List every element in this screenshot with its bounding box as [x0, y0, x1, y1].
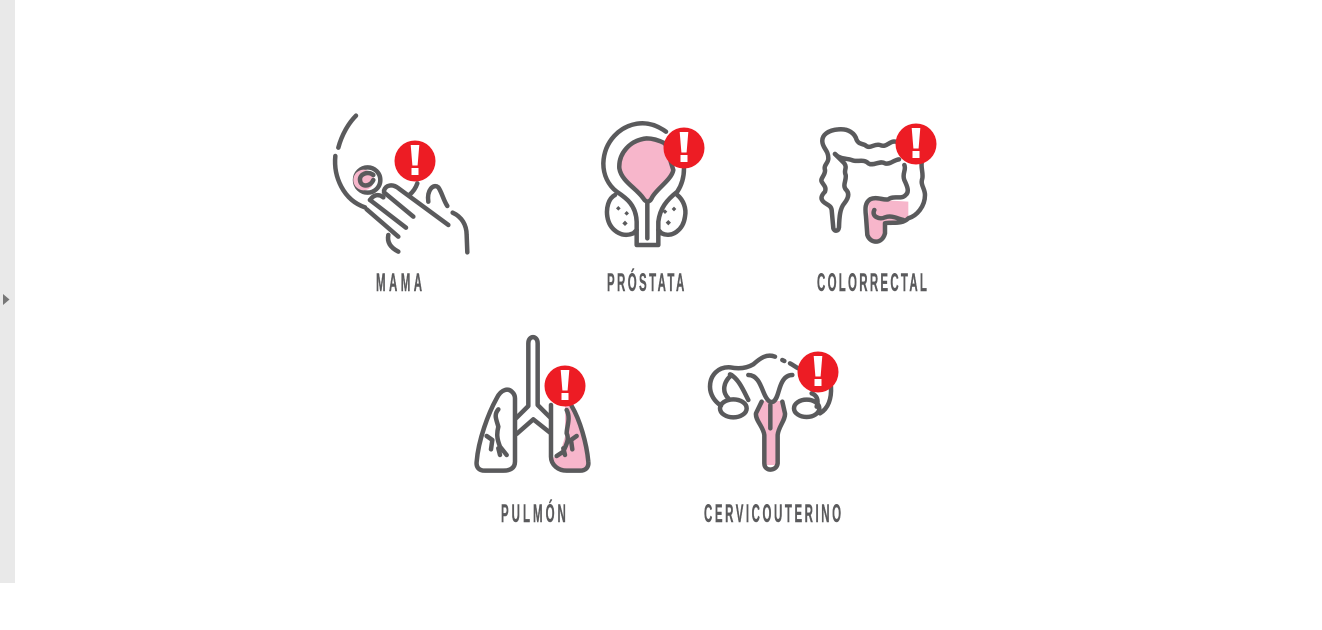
icon: uterus: [710, 356, 831, 470]
label: cervicouterino: CERVICOUTERINO: [704, 500, 841, 528]
label: pulmón: PULMÓN: [501, 498, 566, 528]
icon: alert badge: [798, 352, 838, 392]
label: mama: MAMA: [376, 269, 422, 297]
icon: lungs: [477, 337, 588, 471]
icon: expand arrow: [3, 294, 10, 305]
item: cervicouterino: [704, 352, 841, 528]
icon: colon: [821, 129, 925, 243]
item: colorrectal: [817, 124, 936, 297]
icon: breast self-exam: [335, 116, 467, 252]
item: pulmón: [477, 337, 588, 528]
label: colorrectal: COLORRECTAL: [817, 269, 927, 297]
item: próstata: [603, 123, 704, 297]
side panel: [0, 0, 15, 583]
icon: alert badge: [394, 140, 436, 182]
icon: alert badge: [896, 124, 936, 164]
icon: prostate: [603, 123, 685, 245]
icon: alert badge: [664, 128, 704, 168]
label: próstata: PRÓSTATA: [607, 267, 684, 297]
icon: alert badge: [544, 366, 586, 406]
item: mama: [335, 116, 467, 297]
